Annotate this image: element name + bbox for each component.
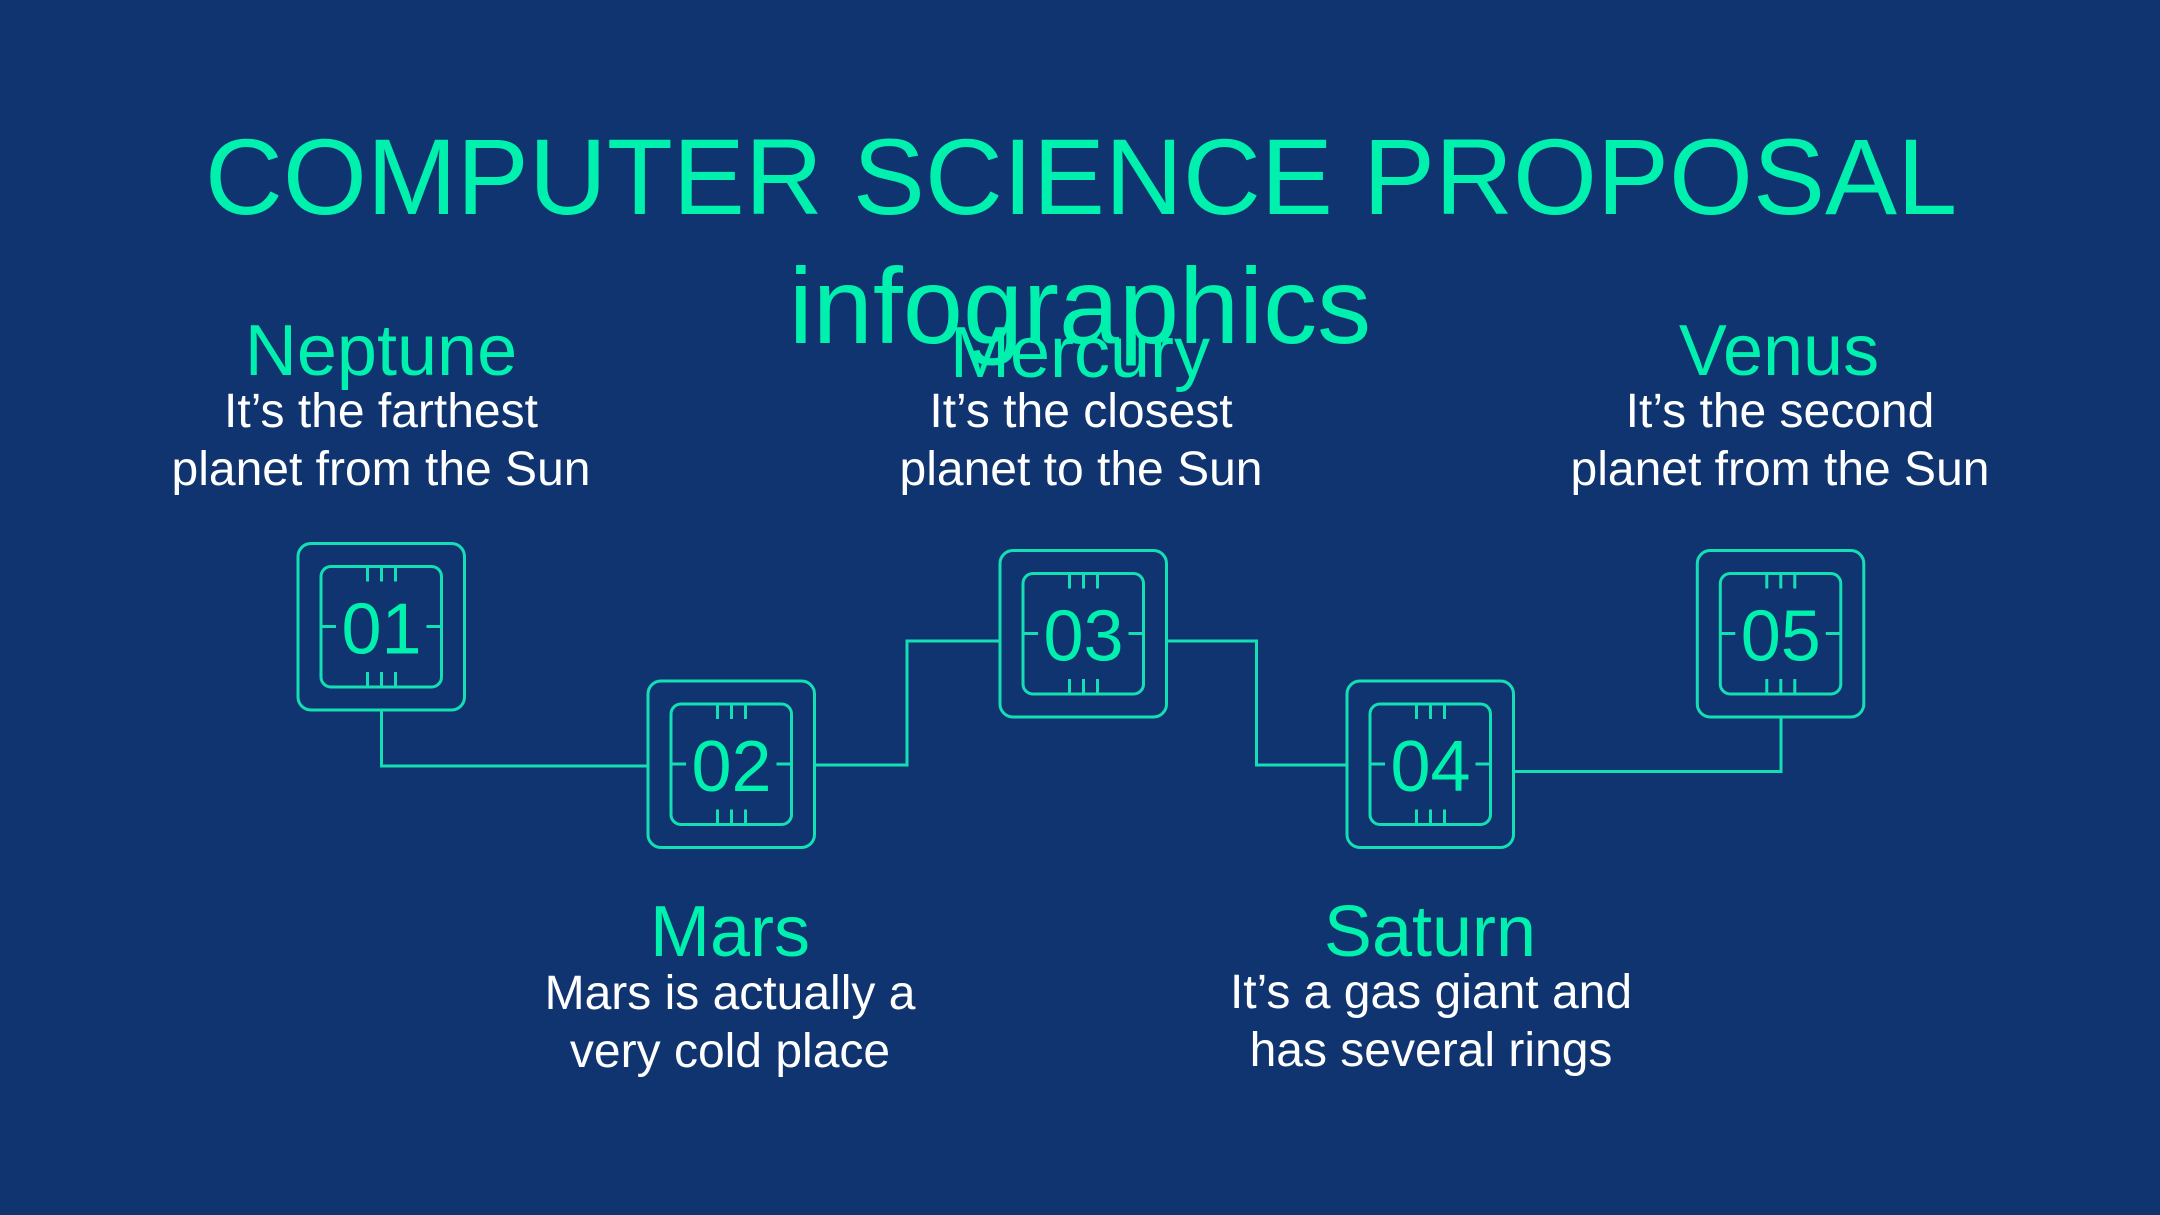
text block: Saturn: It’s a gas giant and <box>1230 966 1632 1019</box>
step 05: chip icon: 05 <box>1741 596 1821 676</box>
text block: Neptune: Neptune <box>245 311 517 391</box>
step 04: chip icon <box>1347 681 1514 848</box>
text block: Mercury: Mercury <box>950 313 1210 393</box>
step 03: chip icon: 03 <box>1043 596 1124 676</box>
connector: 02 to 03 <box>814 641 1000 765</box>
step 01: chip icon: 01 <box>341 590 422 670</box>
text block: Mars: very cold place <box>570 1025 890 1078</box>
text block: Mars: Mars <box>650 892 810 972</box>
text block: Venus: planet from the Sun <box>1571 443 1989 496</box>
text block: Venus: Venus <box>1679 311 1879 391</box>
step 02: chip icon: 02 <box>691 727 772 807</box>
connector: 04 to 05 <box>1513 717 1781 772</box>
title <box>205 116 1957 366</box>
step 05: chip icon <box>1697 550 1864 717</box>
text block: Mars <box>545 892 916 1078</box>
text block: Saturn <box>1230 892 1632 1077</box>
step 01: chip icon <box>298 544 464 710</box>
text block: Mercury: It’s the closest <box>929 385 1233 438</box>
step 03: chip icon <box>1000 550 1166 717</box>
step 02: chip icon <box>648 681 814 848</box>
text block: Neptune: It’s the farthest <box>224 385 538 438</box>
connector: 01 to 02 <box>382 711 648 766</box>
text block: Mercury: planet to the Sun <box>900 443 1262 496</box>
text block: Venus: It’s the second <box>1626 385 1934 438</box>
text block: Venus <box>1571 311 1989 496</box>
text block: Neptune <box>172 311 590 496</box>
text block: Mars: Mars is actually a <box>545 967 916 1020</box>
step 04: chip icon: 04 <box>1390 727 1471 807</box>
text block: Saturn: Saturn <box>1324 892 1536 972</box>
connector: 03 to 04 <box>1167 641 1347 765</box>
text block: Mercury <box>900 313 1262 496</box>
text block: Saturn: has several rings <box>1250 1024 1612 1077</box>
text block: Neptune: planet from the Sun <box>172 443 590 496</box>
title: COMPUTER SCIENCE PROPOSAL <box>205 116 1957 237</box>
title: infographics <box>789 245 1371 366</box>
